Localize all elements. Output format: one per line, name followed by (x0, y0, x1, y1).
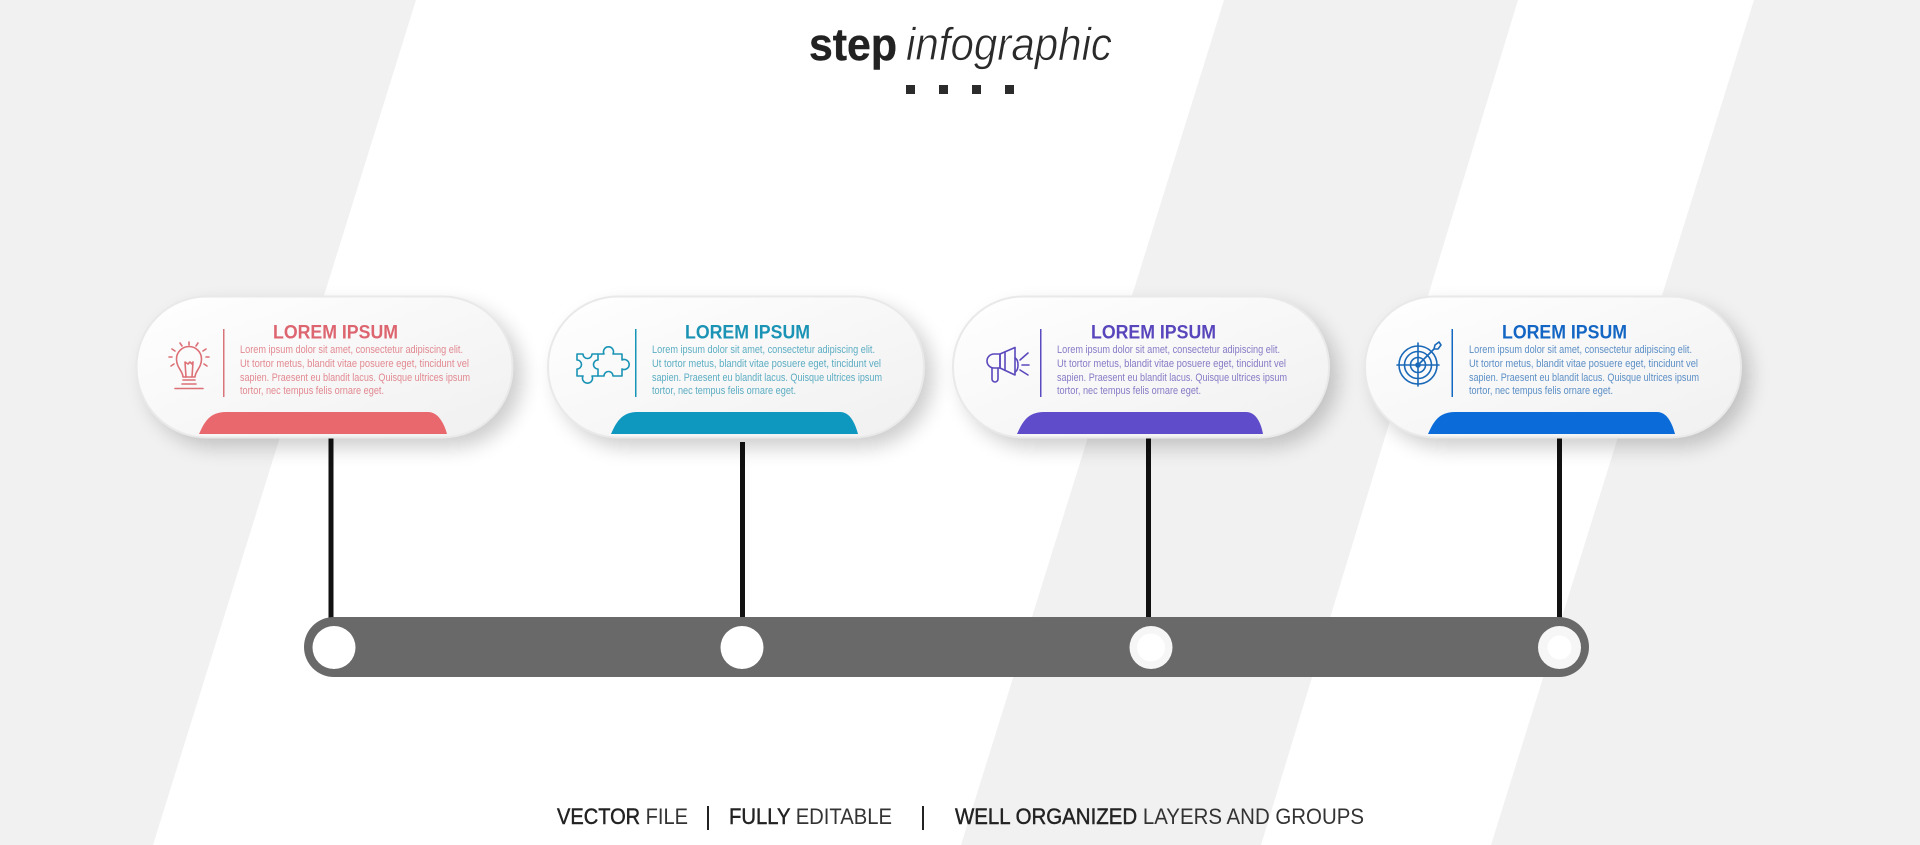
body text: Ut tortor metus, blandit vitae posuere eget, tincidunt vel (652, 358, 881, 370)
separator (922, 806, 924, 830)
body text: Lorem ipsum dolor sit amet, consectetur adipiscing elit. (652, 344, 875, 356)
body text: sapien. Praesent eu blandit lacus. Quisque ultrices ipsum (652, 372, 882, 384)
separator (707, 806, 709, 830)
body text: Lorem ipsum dolor sit amet, consectetur adipiscing elit. (1057, 344, 1280, 356)
title (809, 18, 1112, 70)
icon: light bulb (169, 342, 209, 388)
divider (1452, 329, 1453, 397)
timeline bar (304, 617, 1589, 677)
tab (199, 412, 447, 434)
panel: step 2 (548, 296, 933, 447)
panel: step 4 (1365, 296, 1750, 447)
body text: Lorem ipsum dolor sit amet, consectetur adipiscing elit. (1469, 344, 1692, 356)
divider (1040, 329, 1042, 397)
body text: tortor, nec tempus felis ornare eget. (652, 385, 796, 397)
node 1 (312, 626, 356, 669)
tab (611, 412, 858, 434)
body text: Ut tortor metus, blandit vitae posuere eget, tincidunt vel (1057, 358, 1286, 370)
panel: step 3 (953, 296, 1338, 447)
tab (1428, 412, 1675, 434)
panel: step 1 (136, 296, 522, 447)
icon: puzzle (577, 347, 629, 383)
connector lines (328, 437, 1562, 619)
heading: LOREM IPSUM (1091, 322, 1216, 344)
body text (652, 344, 882, 397)
body text (1469, 344, 1699, 397)
tab (1017, 412, 1263, 434)
body text: tortor, nec tempus felis ornare eget. (1469, 385, 1613, 397)
body text (240, 344, 470, 397)
body text: sapien. Praesent eu blandit lacus. Quisque ultrices ipsum (1057, 372, 1287, 384)
body text: Ut tortor metus, blandit vitae posuere eget, tincidunt vel (240, 358, 469, 370)
title: infographic (906, 18, 1112, 70)
footer text: VECTOR FILE (557, 804, 688, 829)
node 4 (1538, 626, 1581, 669)
icon: target (1397, 342, 1441, 386)
heading: LOREM IPSUM (273, 322, 398, 344)
body text: tortor, nec tempus felis ornare eget. (1057, 385, 1201, 397)
body text: tortor, nec tempus felis ornare eget. (240, 385, 384, 397)
body text (1057, 344, 1287, 397)
footer text: WELL ORGANIZED LAYERS AND GROUPS (955, 804, 1364, 829)
title dots (906, 85, 1014, 94)
body text: Ut tortor metus, blandit vitae posuere eget, tincidunt vel (1469, 358, 1698, 370)
body text: Lorem ipsum dolor sit amet, consectetur adipiscing elit. (240, 344, 463, 356)
node 3 (1130, 626, 1172, 669)
footer text: FULLY EDITABLE (729, 804, 892, 829)
divider (635, 329, 636, 397)
body text: sapien. Praesent eu blandit lacus. Quisque ultrices ipsum (240, 372, 470, 384)
title: step (809, 19, 897, 70)
node 2 (720, 626, 764, 669)
heading: LOREM IPSUM (1502, 322, 1627, 344)
footer text (557, 804, 1364, 830)
icon: megaphone (987, 348, 1029, 382)
body text: sapien. Praesent eu blandit lacus. Quisque ultrices ipsum (1469, 372, 1699, 384)
divider (223, 329, 224, 397)
heading: LOREM IPSUM (685, 322, 810, 344)
